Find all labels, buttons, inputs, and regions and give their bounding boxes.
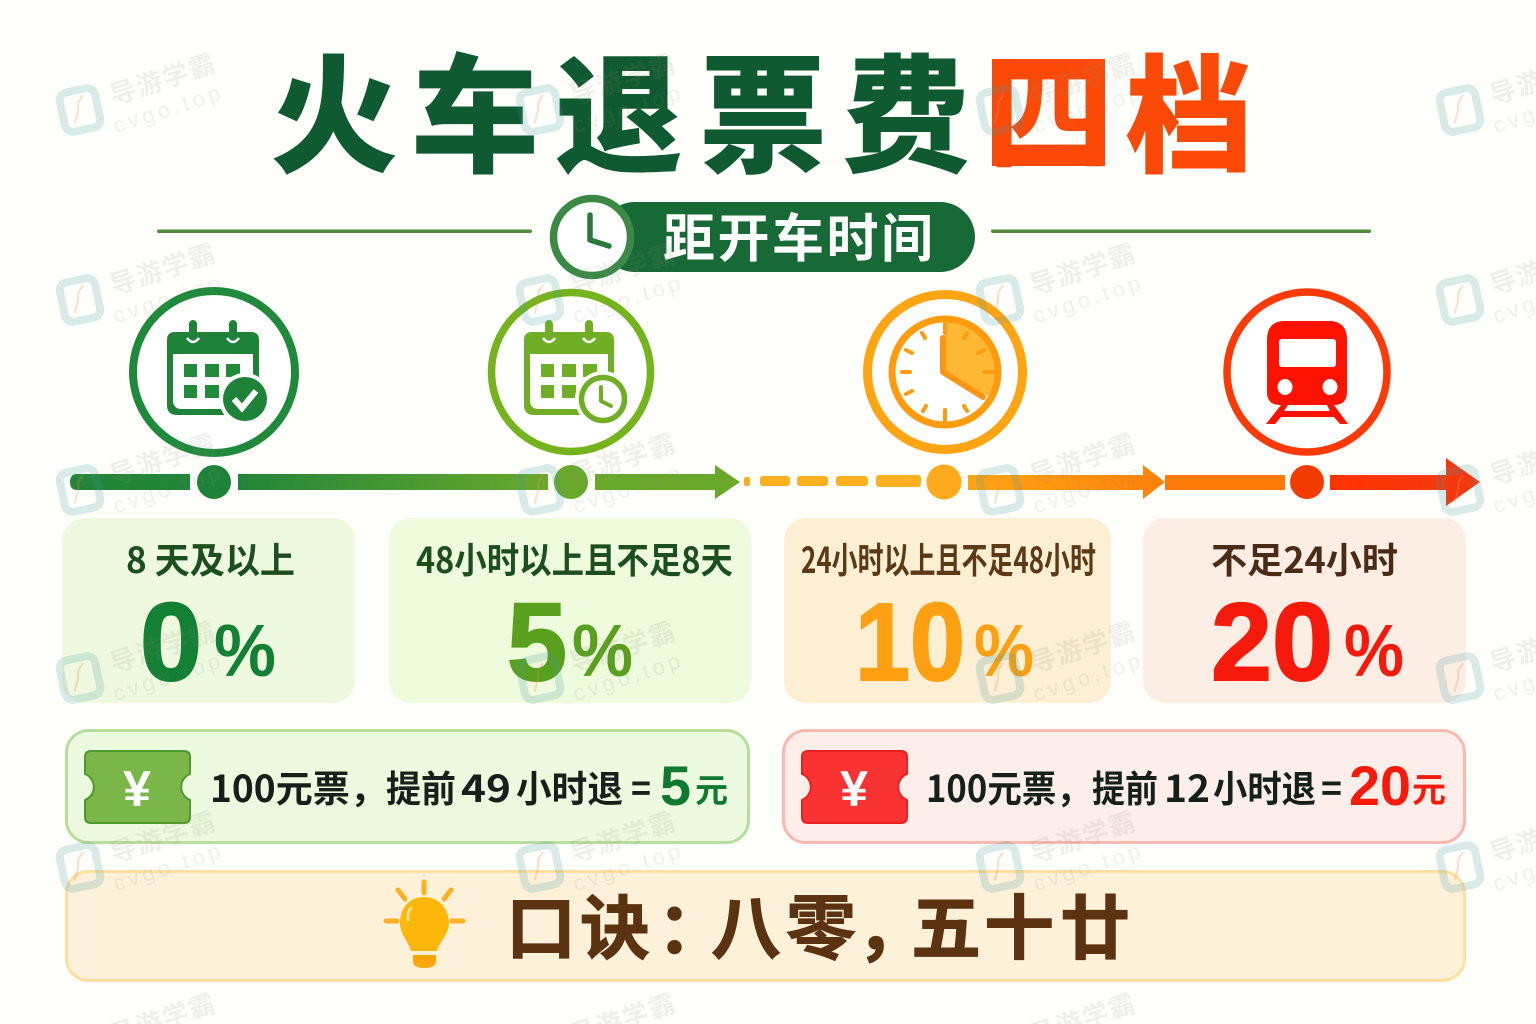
watermarks: cvgo.top bbox=[1030, 837, 1147, 896]
example sentence: 100元票， bbox=[926, 759, 1091, 813]
panel: 24 to 48 hours bbox=[784, 518, 1111, 704]
example sentence bbox=[210, 759, 651, 813]
title: 档 bbox=[1125, 14, 1253, 199]
watermarks: cvgo.top bbox=[1030, 647, 1147, 706]
watermarks: 导游学霸 bbox=[1025, 233, 1141, 302]
watermarks: 导游学霸 bbox=[105, 801, 221, 870]
panel: 8 days or more: % bbox=[214, 609, 276, 692]
example: 49 hours: 5 bbox=[660, 754, 691, 817]
timeline bbox=[70, 458, 1480, 506]
example sentence: 小时退 bbox=[1213, 759, 1316, 813]
watermarks: 导游学霸 bbox=[565, 611, 681, 680]
watermarks: 导游学霸 bbox=[105, 423, 221, 492]
example sentence: 100元票， bbox=[210, 759, 387, 813]
watermarks: cvgo.top bbox=[110, 79, 227, 138]
example sentence: 小时退 bbox=[516, 759, 623, 813]
watermarks: cvgo.top bbox=[110, 459, 227, 518]
watermarks: cvgo.top bbox=[570, 837, 687, 896]
watermarks: 导游学霸 bbox=[565, 423, 681, 492]
watermarks: cvgo.top bbox=[570, 459, 687, 518]
icon: red ticket: ¥ bbox=[840, 761, 868, 817]
title: 火车退票费 bbox=[270, 14, 970, 199]
watermarks: cvgo.top bbox=[570, 79, 687, 138]
watermarks: 导游学霸 bbox=[105, 43, 221, 112]
example: 12 hours bbox=[784, 730, 1464, 842]
watermarks: cvgo.top bbox=[1030, 459, 1147, 518]
watermarks: 导游学霸 bbox=[565, 43, 681, 112]
panel: under 24 hours: 不足24小时 bbox=[1211, 532, 1398, 584]
example: 12 hours: 20 bbox=[1349, 754, 1411, 817]
watermarks: 导游学霸 bbox=[1025, 801, 1141, 870]
panel: under 24 hours: % bbox=[1344, 609, 1404, 692]
title highlight: 四: 四 bbox=[987, 16, 1111, 196]
icon: red ticket bbox=[802, 751, 907, 823]
panel: 48 hours to 8 days bbox=[389, 518, 751, 704]
panel: 48 hours to 8 days: 48小时以上且不足8天 bbox=[416, 532, 733, 584]
watermarks: 导游学霸 bbox=[1025, 423, 1141, 492]
watermarks: cvgo.top bbox=[110, 647, 227, 706]
icon: calendar with clock bbox=[492, 292, 650, 452]
section header: time to departure: 距开车时间 bbox=[663, 197, 933, 272]
panel: 8 days or more: 8 天及以上 bbox=[126, 532, 295, 584]
watermarks: cvgo.top bbox=[110, 837, 227, 896]
watermarks: cvgo.top bbox=[1030, 269, 1147, 328]
example: 49 hours: 元 bbox=[695, 764, 728, 812]
watermarks: cvgo.top bbox=[110, 269, 227, 328]
panel: 48 hours to 8 days: 5 bbox=[507, 581, 567, 704]
panel: under 24 hours: 20 bbox=[1211, 581, 1333, 704]
icon: calendar with check bbox=[133, 291, 295, 453]
panel: under 24 hours bbox=[1143, 518, 1466, 704]
example sentence: = bbox=[631, 759, 651, 813]
example sentence: = bbox=[1321, 759, 1342, 813]
watermarks: 导游学霸 bbox=[105, 611, 221, 680]
panel: 8 days or more: 0 bbox=[140, 581, 202, 704]
example: 12 hours: 元 bbox=[1412, 763, 1446, 812]
watermarks: 导游学霸 bbox=[1025, 611, 1141, 680]
panel: 8 days or more bbox=[62, 518, 355, 704]
panel: 24 to 48 hours: 10 bbox=[855, 581, 965, 704]
example sentence: 12 bbox=[1164, 759, 1210, 813]
example sentence: 49 bbox=[461, 759, 511, 813]
watermarks: cvgo.top bbox=[570, 647, 687, 706]
watermarks: cvgo.top bbox=[1030, 79, 1147, 138]
mnemonic panel bbox=[66, 872, 1464, 980]
icon: light bulb bbox=[386, 882, 463, 968]
timeline dashes bbox=[744, 475, 921, 487]
watermarks: 导游学霸 bbox=[1025, 43, 1141, 112]
watermarks: 导游学霸 bbox=[105, 233, 221, 302]
panel: 48 hours to 8 days: % bbox=[572, 609, 633, 692]
icon: clock bbox=[554, 198, 630, 276]
mnemonic panel: 口诀：八零，五十廿 bbox=[506, 873, 1130, 974]
icon: green ticket bbox=[85, 751, 190, 823]
icon: train bbox=[1227, 292, 1387, 452]
example sentence: 提前 bbox=[1092, 759, 1158, 813]
example sentence bbox=[926, 759, 1342, 813]
icon: green ticket: ¥ bbox=[123, 761, 151, 817]
watermarks: cvgo.top bbox=[570, 269, 687, 328]
panel: 24 to 48 hours: % bbox=[974, 609, 1034, 692]
section header: time to departure bbox=[157, 197, 1371, 276]
watermarks: 导游学霸 bbox=[565, 233, 681, 302]
panel: 24 to 48 hours: 24小时以上且不足48小时 bbox=[801, 532, 1096, 584]
example: 49 hours bbox=[66, 730, 748, 842]
watermarks: 导游学霸 bbox=[565, 801, 681, 870]
icon: clock bbox=[868, 294, 1022, 450]
example sentence: 提前 bbox=[386, 759, 456, 813]
